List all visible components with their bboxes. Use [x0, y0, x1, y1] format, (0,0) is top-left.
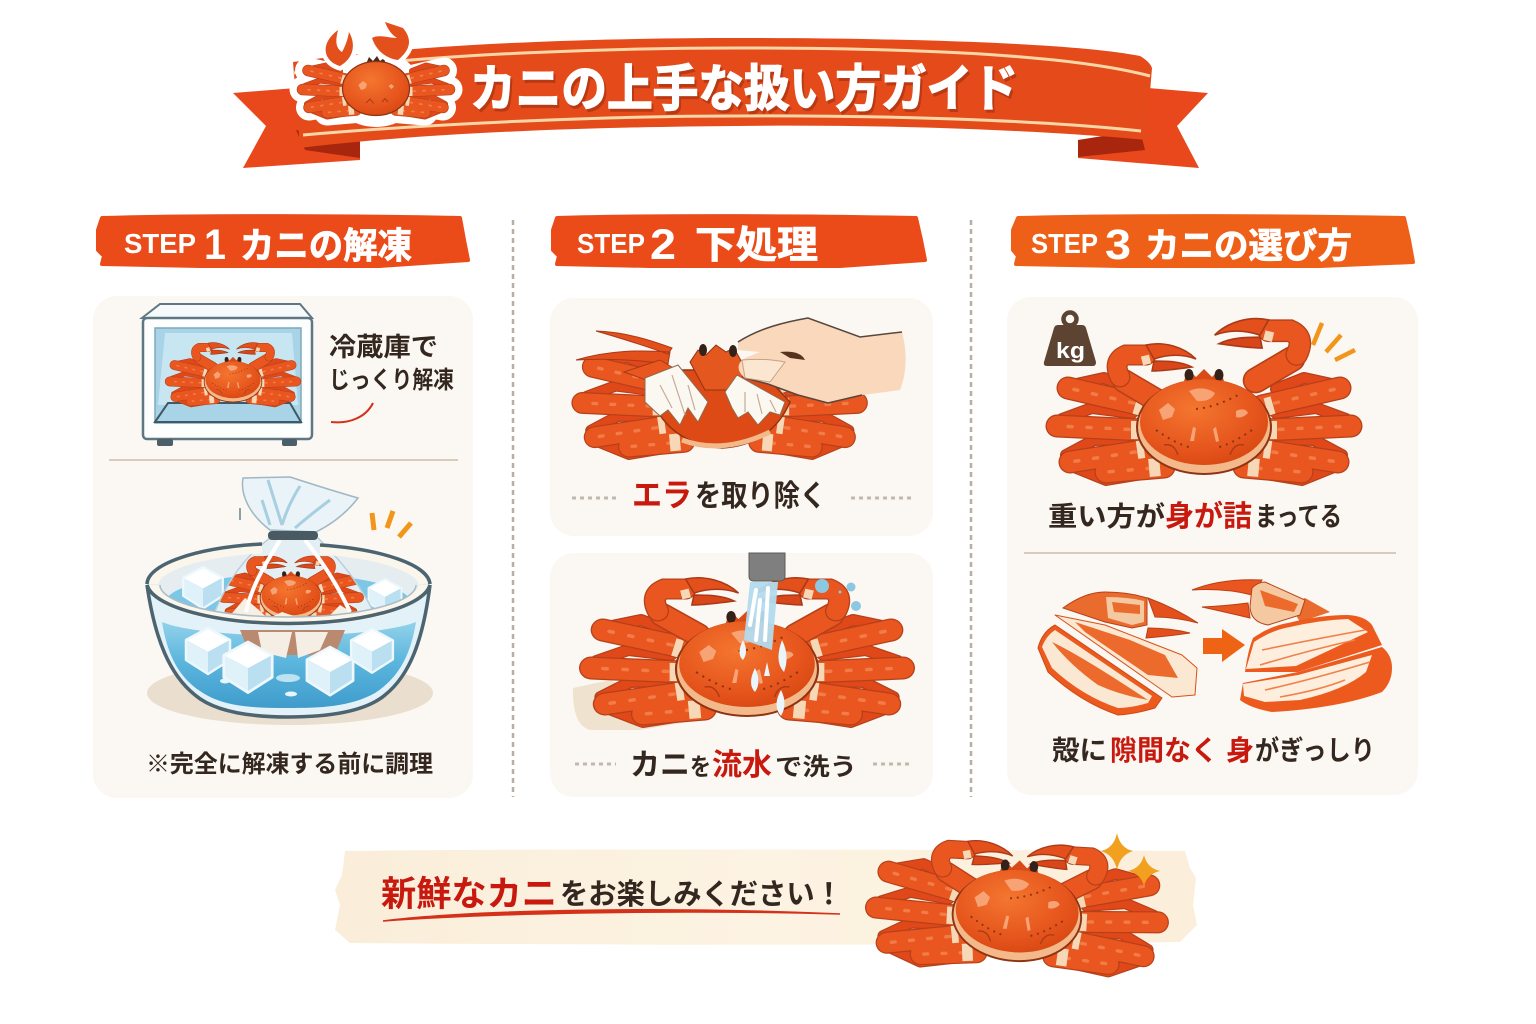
- closing message: 新鮮なカニ: [381, 875, 557, 914]
- text: remove gills: [632, 477, 826, 513]
- title ribbon: [233, 22, 1208, 168]
- arrow: [1203, 629, 1245, 662]
- step 2 header: [553, 216, 925, 269]
- icon: fridge with crab: [142, 304, 312, 446]
- closing message: をお楽しみください！: [560, 878, 843, 911]
- illustration: packed meat claw: [1192, 580, 1392, 712]
- ribbon stripes: [293, 48, 1150, 135]
- hand: [738, 318, 906, 403]
- panel: step 1 thawing: [93, 296, 473, 798]
- sparkles: [1101, 833, 1160, 886]
- panel: remove gills: [550, 298, 933, 536]
- title crab sticker: [302, 22, 450, 127]
- text: rinse: 流水: [712, 749, 772, 782]
- accent ticks: [1313, 323, 1355, 360]
- step 1 header: [98, 216, 468, 269]
- ribbon folds: [296, 130, 1145, 158]
- divider: step 1 to 2: [512, 220, 514, 797]
- text: heavier: 身が詰: [1165, 499, 1252, 533]
- text: heavier: 重い方が: [1048, 501, 1165, 532]
- icon: faucet: [749, 553, 785, 581]
- step 3 header: STEP: [1031, 228, 1098, 259]
- text: refrigerator thawing: [329, 332, 454, 394]
- step 3 header: 3: [1105, 221, 1131, 269]
- divider: step 2 to 3: [970, 220, 972, 797]
- step 2 header: STEP: [577, 228, 645, 259]
- illustration: crab with opened shell and hand: [576, 318, 906, 454]
- ribbon main band: [293, 38, 1152, 148]
- water stream and droplets: [740, 579, 861, 716]
- step 3 header: カニの選び方: [1145, 227, 1352, 266]
- text: packed meat: 身: [1226, 735, 1254, 766]
- gills: [645, 365, 708, 425]
- step 2 header: 下処理: [695, 225, 818, 267]
- illustration: crab: [873, 836, 1162, 974]
- icon: weight: [1044, 312, 1096, 366]
- bottom banner: [335, 833, 1197, 974]
- text: remove gills: エラ: [632, 477, 692, 513]
- text: heavier: まってる: [1255, 502, 1342, 532]
- red accent stroke: [331, 403, 373, 422]
- text: packed meat: 殻に: [1052, 736, 1107, 766]
- panel: choosing crab: [1007, 297, 1418, 795]
- icon: weight: kg: [1056, 338, 1085, 363]
- title ribbon: カニの上手な扱い方ガイド: [470, 61, 1018, 117]
- text: rinse: カニ: [630, 749, 690, 782]
- title text: カニの上手な扱い方ガイド: [472, 64, 1020, 120]
- text: packed meat: がぎっしり: [1255, 735, 1375, 766]
- ribbon right tail: [1078, 88, 1208, 168]
- underline stroke: [383, 910, 840, 921]
- title crab claws: [326, 30, 353, 66]
- icon: bowl with ice water and bagged crab: [147, 477, 433, 725]
- illustration: thin meat claw: [1038, 592, 1198, 715]
- step 1 header: STEP: [124, 228, 196, 259]
- text: packed meat: 隙間なく: [1110, 735, 1218, 766]
- text: refrigerator thawing: 冷蔵庫で: [329, 332, 438, 362]
- step 2 header: 2: [650, 221, 676, 269]
- text: rinse: [630, 749, 857, 782]
- closing message: [381, 875, 843, 914]
- text: heavier: [1048, 499, 1342, 533]
- panel: rinse under running water: [550, 553, 933, 797]
- text: refrigerator thawing: じっくり解凍: [329, 367, 454, 394]
- text: packed meat: [1052, 735, 1375, 766]
- step 3 header: [1013, 216, 1413, 269]
- text: rinse: を: [690, 754, 711, 781]
- step 1 header: カニの解凍: [240, 225, 412, 266]
- text: remove gills: を取り除く: [695, 480, 826, 513]
- sand shadow: [573, 680, 700, 730]
- text: rinse: で洗う: [775, 754, 857, 781]
- caution text: ※完全に解凍する前に調理: [146, 751, 433, 778]
- illustration: heavy crab: [1057, 319, 1351, 480]
- step 1 header: 1: [204, 221, 226, 269]
- illustration: crab: [591, 578, 903, 722]
- ribbon left tail: [233, 88, 360, 168]
